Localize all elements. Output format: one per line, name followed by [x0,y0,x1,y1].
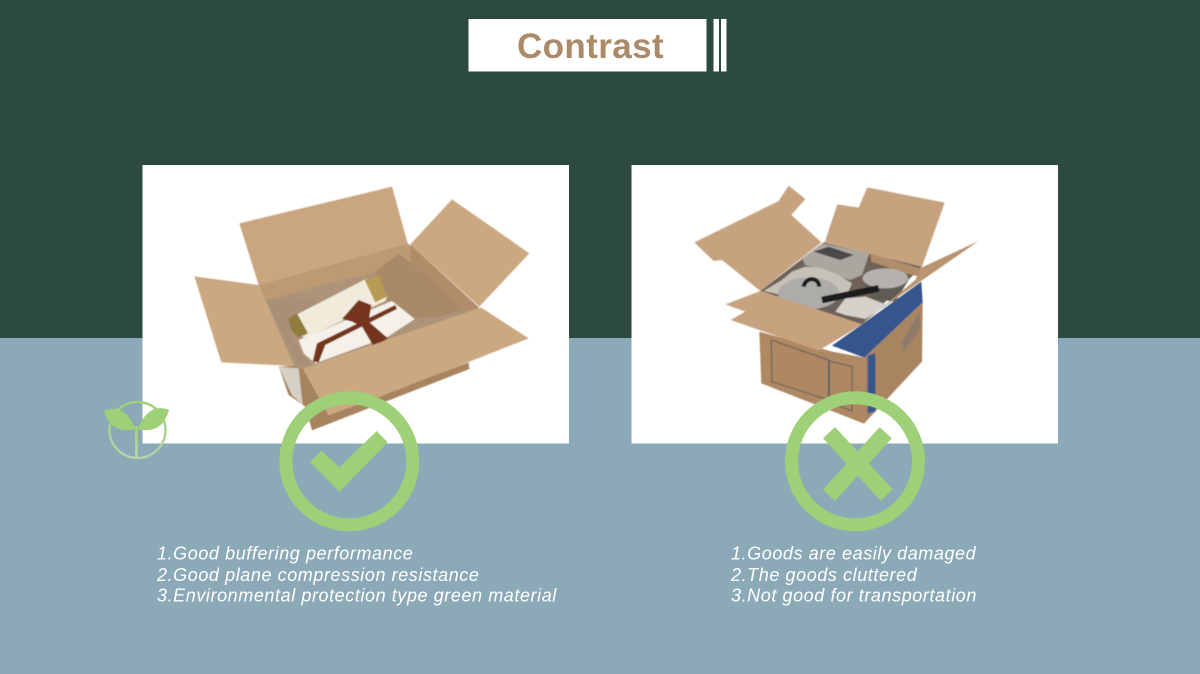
text: bad packaging drawbacks: 3.Not good for transportation [731,586,977,606]
towel [299,301,415,363]
title: Contrast [517,27,664,66]
icon: check mark in circle [286,398,413,525]
icon: open carton with loose kitchenware [694,186,979,424]
toaster [802,243,869,280]
icon: cross mark in circle [792,398,918,525]
title [468,19,726,72]
text: bad packaging drawbacks: 1.Goods are easily damaged [731,544,977,564]
panel: bad packaging photo [632,165,1058,444]
text: good packaging benefits: 2.Good plane compression resistance [156,565,479,585]
icon: open carton with gift and paper filler [194,187,529,430]
text: bad packaging drawbacks [730,544,977,606]
pot [862,280,909,302]
text: bad packaging drawbacks: 2.The goods cluttered [730,565,918,585]
text: good packaging benefits: 1.Good buffering performance [157,544,413,564]
text: good packaging benefits: 3.Environmental protection type green material [157,586,557,606]
kettle [764,267,852,302]
ribbon [313,305,397,362]
text: good packaging benefits [156,544,557,606]
panel: good packaging photo [142,165,569,444]
bottle [288,279,387,338]
icon: sprout logo [104,402,169,458]
